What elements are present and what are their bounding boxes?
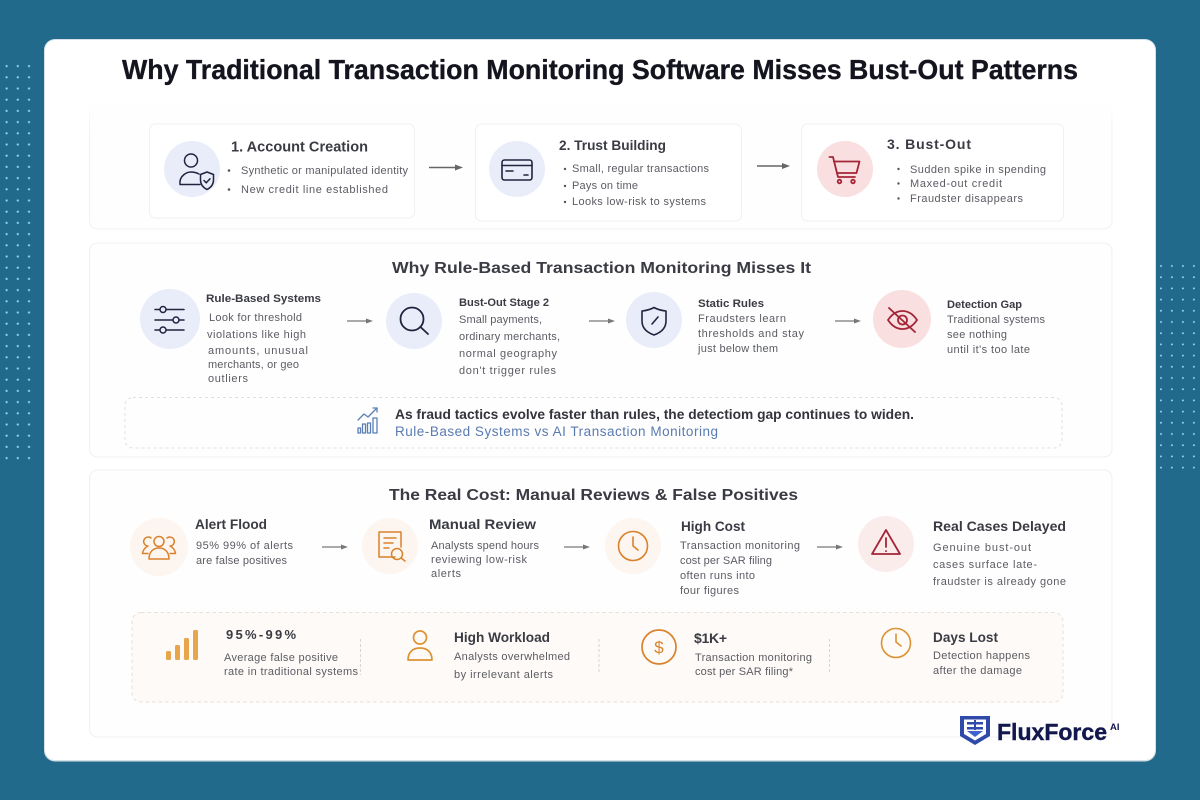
- text: Days Lost: [933, 629, 998, 645]
- icon: dollar coin: [642, 630, 676, 664]
- text: outliers: [208, 373, 248, 385]
- icon: logo shield: [960, 716, 990, 745]
- text: just below them: [697, 343, 778, 355]
- text: violations like high: [207, 329, 306, 341]
- text: Traditional systems: [947, 314, 1046, 326]
- text: bust-out: Sudden spike in spending: [910, 164, 1046, 176]
- text: High Workload: [454, 629, 550, 645]
- text: [680, 518, 800, 597]
- text: [933, 518, 1066, 588]
- text: cost per SAR filing: [680, 555, 772, 567]
- item: alert flood: [130, 516, 294, 576]
- text: bust-out: Maxed-out credit: [910, 178, 1002, 190]
- text: cases surface late-: [933, 559, 1037, 571]
- text: fraudster is already gone: [933, 576, 1066, 588]
- item: high cost: [605, 518, 800, 597]
- callout text: As fraud tactics evolve faster than rules, the detectiom gap continues to widen.: [395, 406, 914, 422]
- item: real cases delayed: [858, 516, 1066, 588]
- text: Transaction monitoring: [680, 540, 800, 552]
- text: [195, 516, 294, 567]
- arrow: [322, 544, 348, 550]
- heading: Why Rule-Based Transaction Monitoring Misses It: [392, 260, 811, 277]
- text: rate in traditional systems: [224, 666, 358, 678]
- text: don't trigger rules: [459, 365, 556, 377]
- arrow: [817, 544, 843, 550]
- icon: clock: [605, 518, 661, 574]
- text: [224, 627, 358, 678]
- stat: 95%-99%: [166, 627, 358, 678]
- text: 95%-99%: [226, 627, 296, 642]
- text: [947, 299, 1046, 356]
- icon: document with magnifier: [362, 518, 418, 574]
- text: Rule-Based Systems: [206, 293, 321, 305]
- icon: shield: [626, 292, 682, 348]
- text: [697, 298, 804, 355]
- icon: clock: [882, 628, 910, 658]
- item: detection gap: [873, 290, 1046, 356]
- icon: dollar coin: $: [654, 638, 664, 657]
- text: account creation: Synthetic or manipulated identity: [241, 165, 408, 177]
- text: bust-out: [887, 136, 1046, 205]
- text: alerts: [431, 568, 462, 580]
- text: account creation: New credit line established: [241, 184, 388, 196]
- logo: FluxForce AI: [960, 716, 1120, 745]
- text: trust building: 2. Trust Building: [559, 137, 666, 153]
- arrow: [757, 163, 790, 169]
- item: rule-based systems: [140, 289, 321, 385]
- logo: FluxForce AI: FluxForce: [997, 719, 1107, 745]
- icon: signal bars: [166, 630, 198, 660]
- icon: sliders: [140, 289, 200, 349]
- step card: trust building: [476, 124, 742, 221]
- text: until it's too late: [947, 344, 1030, 356]
- text: after the damage: [933, 665, 1022, 677]
- text: Detection Gap: [947, 299, 1022, 311]
- text: 95% 99% of alerts: [196, 540, 294, 552]
- text: trust building: Small, regular transactions: [572, 163, 710, 175]
- text: ordinary merchants,: [459, 331, 560, 343]
- arrow: [589, 318, 615, 324]
- icon: people: [130, 518, 188, 576]
- text: bust-out: 3. Bust-Out: [887, 136, 971, 152]
- text: Static Rules: [698, 298, 764, 310]
- dot pattern: left: [1, 60, 35, 460]
- text: Analysts overwhelmed: [454, 651, 570, 663]
- text: Average false positive: [224, 652, 338, 664]
- icon: warning triangle: [858, 516, 914, 572]
- text: Transaction monitoring: [695, 652, 812, 664]
- text: trust building: Looks low-risk to systems: [572, 196, 706, 208]
- text: [933, 629, 1030, 677]
- text: amounts, unusual: [208, 345, 308, 357]
- icon: crossed-out eye: [873, 290, 931, 348]
- text: Genuine bust-out: [933, 542, 1031, 554]
- text: Alert Flood: [195, 516, 267, 532]
- arrow: [347, 318, 373, 324]
- text: High Cost: [681, 518, 745, 534]
- item: bust-out stage 2: [386, 293, 560, 377]
- text: cost per SAR filing*: [695, 666, 794, 678]
- heading: The Real Cost: Manual Reviews & False Positives: [389, 487, 798, 504]
- icon: magnifier: [386, 293, 442, 349]
- dot pattern: right: [1155, 260, 1200, 472]
- text: [206, 293, 321, 385]
- panel: the real cost: [90, 470, 1112, 737]
- text: Look for threshold: [209, 312, 302, 324]
- text: $1K+: [694, 630, 727, 646]
- stat: $1K+: [642, 630, 812, 678]
- text: Bust-Out Stage 2: [459, 297, 549, 309]
- text: [459, 297, 560, 377]
- text: merchants, or geo: [208, 359, 299, 371]
- item: static rules: [626, 292, 804, 355]
- text: trust building: [559, 137, 710, 208]
- text: normal geography: [459, 348, 558, 360]
- text: are false positives: [196, 555, 288, 567]
- arrow: [835, 318, 861, 324]
- item: manual review: [362, 516, 540, 580]
- stat: high workload: [408, 629, 570, 681]
- text: [454, 629, 570, 681]
- text: account creation: [228, 140, 408, 196]
- text: bust-out: Fraudster disappears: [910, 193, 1024, 205]
- icon: credit card: [489, 141, 545, 197]
- callout link: Rule-Based Systems vs AI Transaction Monitoring: [395, 424, 718, 439]
- text: Analysts spend hours: [431, 540, 540, 552]
- icon: growth chart: [358, 408, 377, 433]
- icon: person with shield: [164, 141, 220, 197]
- text: account creation: 1. Account Creation: [231, 140, 368, 156]
- step card: bust-out: [802, 124, 1064, 221]
- text: reviewing low-risk: [431, 554, 528, 566]
- text: Manual Review: [429, 516, 536, 532]
- panel: bust-out stages: [90, 105, 1112, 229]
- callout: widening gap: [125, 398, 1062, 448]
- text: Real Cases Delayed: [933, 518, 1066, 534]
- text: see nothing: [947, 329, 1007, 341]
- text: by irrelevant alerts: [454, 669, 554, 681]
- icon: shopping cart: [817, 141, 873, 197]
- step card: account creation: [150, 124, 414, 218]
- icon: person: [408, 631, 432, 660]
- panel: key statistics: [132, 612, 1063, 702]
- text: often runs into: [680, 570, 755, 582]
- logo: FluxForce AI: AI: [1110, 722, 1120, 732]
- arrow: [429, 164, 463, 170]
- panel: why rule-based monitoring misses it: [90, 243, 1112, 457]
- text: trust building: Pays on time: [572, 180, 638, 192]
- title: Why Traditional Transaction Monitoring Software Misses Bust-Out Patterns: [122, 54, 1078, 85]
- arrow: [564, 544, 590, 550]
- text: Detection happens: [933, 650, 1030, 662]
- text: [429, 516, 540, 580]
- stat: days lost: [882, 628, 1030, 677]
- text: Fraudsters learn: [698, 313, 786, 325]
- text: [694, 630, 812, 678]
- text: thresholds and stay: [698, 328, 804, 340]
- text: Small payments,: [459, 314, 542, 326]
- text: four figures: [680, 585, 740, 597]
